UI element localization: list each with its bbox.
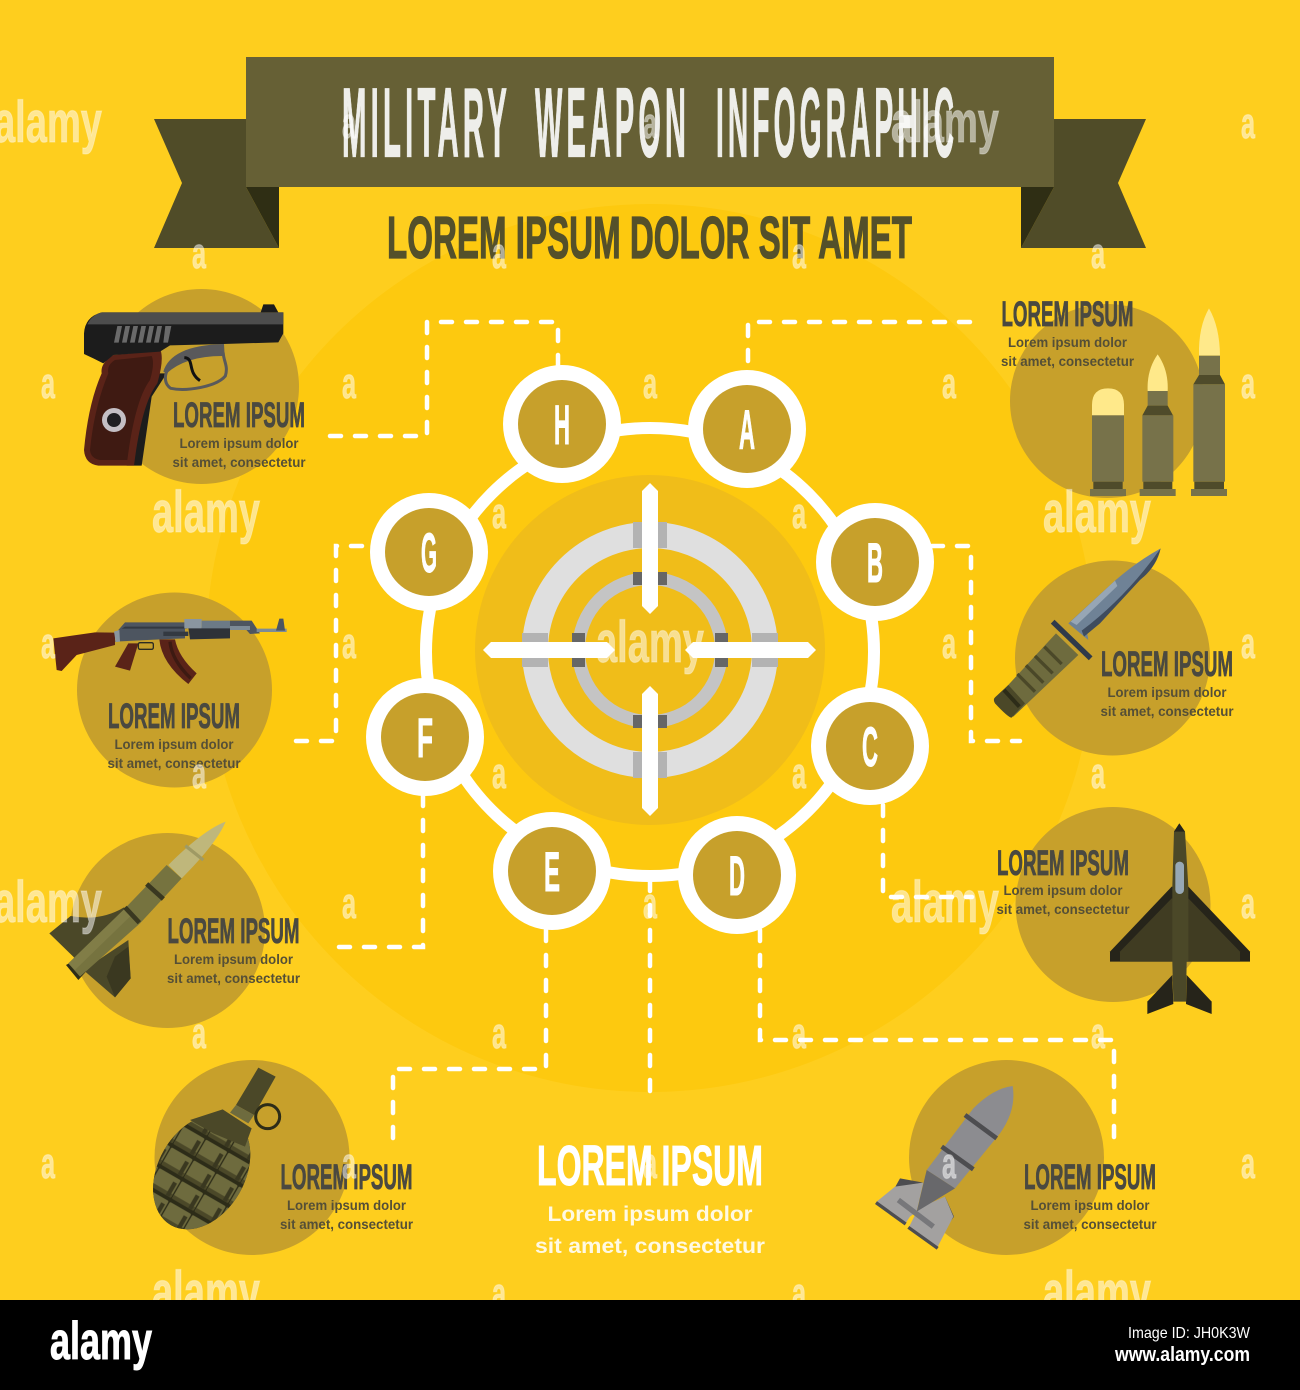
icon: fighter jet [1110,823,1250,1014]
text block: Lorem ipsum dolor [174,952,294,967]
watermarks: a [1241,359,1255,408]
watermarks: a [942,619,956,668]
text block [172,396,306,470]
watermarks: a [492,229,506,278]
text block: sit amet, consectetur [1100,704,1234,719]
watermarks: a [492,1269,506,1318]
panel: rocket [49,822,301,1028]
text block: sit amet, consectetur [1001,354,1135,369]
text block: LOREM IPSUM [1002,295,1134,334]
text block: sit amet, consectetur [280,1217,414,1232]
center text block: LOREM IPSUM [537,1134,763,1198]
watermarks: a [41,1139,55,1188]
panel: bullets [1001,295,1227,498]
watermarks: alamy [891,90,999,155]
title: MILITARY [342,68,511,178]
watermarks: a [643,99,657,148]
center text block: Lorem ipsum dolor [548,1203,752,1226]
text block: Lorem ipsum dolor [1004,883,1123,898]
node B [816,503,934,621]
center text block [535,1134,765,1258]
title: WEAPON [535,68,690,178]
watermarks: a [643,1139,657,1188]
watermarks: a [792,1269,806,1318]
large background circle [206,204,1094,1092]
node B: B [867,531,883,594]
watermarks: a [643,879,657,928]
text block: sit amet, consectetur [172,455,306,470]
text block: Lorem ipsum dolor [180,436,299,451]
watermarks: a [643,359,657,408]
text block: Lorem ipsum dolor [1008,335,1128,350]
text block: sit amet, consectetur [167,971,301,986]
watermarks: a [41,359,55,408]
central target diagram [475,475,825,825]
node E: E [544,840,560,903]
watermarks: a [792,489,806,538]
node D: D [729,844,745,907]
icon: bullets [1090,308,1227,496]
footer url: www.alamy.com [1114,1344,1250,1366]
watermarks: a [942,1139,956,1188]
text block [1001,295,1135,369]
text block: LOREM IPSUM [1024,1158,1156,1197]
panel: assault rifle [53,592,287,788]
text block: LOREM IPSUM [280,1158,412,1197]
watermarks: a [342,99,356,148]
watermarks: a [1241,1139,1255,1188]
watermarks: a [1241,879,1255,928]
text block: LOREM IPSUM [997,844,1129,883]
icon: rocket [49,822,226,997]
icon: bomb [876,1086,1013,1248]
node G: G [421,521,437,584]
watermarks: alamy [1043,1260,1151,1325]
text block: Lorem ipsum dolor [114,737,234,752]
watermarks: a [492,489,506,538]
watermarks: alamy [1043,480,1151,545]
text block: sit amet, consectetur [108,756,241,771]
node H [503,365,621,483]
icon: assault rifle [53,619,287,684]
watermarks: a [342,619,356,668]
node F: F [417,706,433,769]
ring connecting letters [426,428,874,876]
footer bar [0,1300,1300,1390]
watermarks: a [942,359,956,408]
panel: knife [994,548,1234,756]
text block [108,697,241,771]
text block [1024,1158,1157,1232]
target rings [522,522,778,778]
node E [493,812,611,930]
node A [688,370,806,488]
panel: fighter jet [996,807,1250,1014]
dashed connectors [287,322,1114,1147]
watermarks: alamy [891,870,999,935]
node G [370,493,488,611]
text block: Lorem ipsum dolor [1030,1198,1150,1213]
text block [996,844,1130,917]
watermarks: alamy [152,480,260,545]
icon: pistol [84,304,283,466]
node C: C [862,715,878,778]
watermarks: a [792,229,806,278]
node H: H [554,393,570,456]
watermarks: a [192,229,206,278]
watermarks: a [342,879,356,928]
watermarks: a [492,1009,506,1058]
watermarks: alamy [596,610,704,675]
watermarks: alamy [152,1260,260,1325]
text block: sit amet, consectetur [1024,1217,1157,1232]
watermarks: a [192,749,206,798]
node D [678,816,796,934]
node C [811,687,929,805]
watermarks: a [792,749,806,798]
target disc [475,475,825,825]
center text block: sit amet, consectetur [535,1235,765,1258]
crosshair bars [483,483,816,816]
text block [280,1158,414,1232]
panel: bomb [876,1060,1157,1255]
panel: grenade [133,1060,414,1255]
watermarks: a [1091,749,1105,798]
watermarks: a [342,1139,356,1188]
watermarks: a [1241,619,1255,668]
text block: sit amet, consectetur [996,902,1130,917]
icon: knife [994,548,1161,718]
text block: LOREM IPSUM [173,396,305,435]
text block: Lorem ipsum dolor [287,1198,407,1213]
watermarks: a [1091,229,1105,278]
text block: LOREM IPSUM [108,697,240,736]
text block [1100,645,1234,719]
watermarks: a [492,749,506,798]
watermarks: a [1241,99,1255,148]
watermarks: a [41,619,55,668]
footer image id: Image ID: JH0K3W [1128,1325,1251,1342]
panel: pistol [84,289,306,484]
subtitle: LOREM IPSUM DOLOR SIT AMET [387,205,912,271]
footer logo: alamy [50,1312,152,1371]
text block [167,912,301,986]
node A: A [739,398,755,461]
text block: Lorem ipsum dolor [1108,685,1227,700]
title ribbon [154,57,1146,248]
text block: LOREM IPSUM [168,912,300,951]
icon: grenade [133,1068,280,1247]
watermarks: a [342,359,356,408]
watermarks: a [792,1009,806,1058]
node F [366,678,484,796]
watermarks: a [192,1009,206,1058]
watermarks: a [1091,1009,1105,1058]
